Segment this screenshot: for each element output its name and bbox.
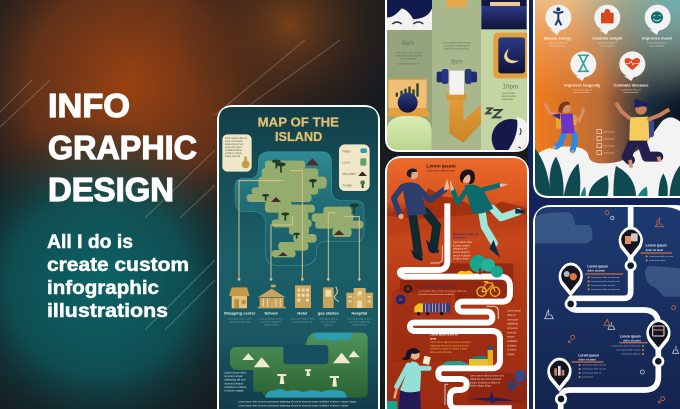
stop 4 text: Lorem ipsum dolor sit amet [582,364,606,367]
dumbbell arm [437,69,481,143]
white cliffs [535,117,680,200]
side text: eiusmod [507,332,517,334]
note card: et dolore magna [225,152,243,155]
body text block 1: adipiscing elit [453,248,467,251]
road side lines [430,246,498,405]
building captions: adipiscing [324,324,333,326]
zz [486,108,501,117]
benefit labels: Improves longevity [564,82,601,87]
legend card [339,144,370,191]
stop 4 text [572,353,606,379]
body text block 3: aliqua enim ad minim [430,352,452,354]
note card: Lorem ipsum dolor sit [225,137,248,140]
body text block 1: sit amet consect [453,244,470,247]
side text [507,310,521,356]
small list: Lorem ipsum [603,138,615,141]
stop 3 text: Lorem ipsum dolor sit amet cons [612,345,640,348]
lower island note: Lorem ipsum dolor [224,370,246,374]
heading: Lorem ipsum [426,164,456,169]
side text: incididunt [507,340,518,343]
benefit captions: amet consectetur [575,91,590,94]
building captions: consectetur adipiscing [230,320,249,323]
trees [457,255,503,278]
body text block 1: Kheerna [453,236,465,240]
panel: route map [533,203,680,409]
girl jumping [545,102,584,153]
title: info graphic design: DESIGN [48,171,174,208]
clouds [535,212,680,297]
note card [222,134,252,172]
legend card: Mountain [342,172,356,176]
lower text [470,375,504,388]
bubble: combats diseases [619,51,645,81]
woman high five [450,169,524,253]
benefit labels [544,36,672,87]
building captions: sed do eiusmod [264,324,278,326]
route road [561,203,658,409]
body text block 1: tempor incididunt [453,254,471,257]
benefit captions: amet consectetur [623,91,639,94]
building captions: Lorem ipsum dolor sit amet [259,317,283,320]
body text block 2: elit sed do eiusmod tempor incididunt [418,293,454,296]
stop 2 text [585,264,623,291]
building labels: Shopping center [224,310,256,315]
map heading [258,117,339,142]
10pm: 10pm [502,83,518,90]
lower island note: et dolore magna [224,389,244,393]
gears [397,286,411,303]
small list [597,129,615,155]
10pm [502,83,518,101]
stop 1 text [641,243,673,262]
body text block 1: Lorem ipsum dolor [453,241,472,244]
town [442,344,493,366]
3pm: consectetur adipiscing elit [443,44,470,47]
pin 3 [646,319,671,353]
top centre block [447,0,467,7]
building captions: consectetur adipiscing [261,320,281,323]
3pm: Lorem ipsum dolor sit amet [443,41,471,44]
stop 3 text: Lorem ipsum dolor sit amet [616,349,641,352]
lagoon [235,152,364,266]
benefit labels: Combats diseases [613,82,649,87]
3pm [443,41,471,65]
stop 4 text: dolor sit amet [578,357,596,361]
building captions: Lorem ipsum dolor sit amet [290,317,315,320]
icon: school [258,285,286,308]
stop 2 text: Lorem ipsum dolor sit amet cons [591,288,620,291]
body text block 2 [418,286,467,296]
benefit captions [548,42,667,94]
side text: magna [507,354,515,356]
lower text: dolore magna aliqua [470,385,492,388]
building captions: consectetur adipiscing [349,320,369,323]
boy jumping [616,99,669,168]
tagline: illustrations [47,301,168,322]
tagline: infographic [47,278,159,299]
bubble: controls weight [594,5,620,35]
lower island note: eiusmod tempor [224,381,243,385]
stop 3 text: Lorem ipsum [620,334,641,338]
8am: Lorem ipsum dolor sit [397,62,420,65]
lower island note: sit amet consec [224,374,243,378]
airplane [470,392,514,404]
building labels: Hospital [351,310,367,315]
building labels: Hotel [297,310,307,315]
body text block 1: Random Lorem Ip [453,232,479,236]
benefit captions: Lorem ipsum dolor sit [621,88,641,91]
side text: dolor sit [507,314,516,317]
map heading: ISLAND [275,129,323,144]
legend card: Jungle [342,183,352,187]
heading [426,164,456,172]
building captions: amet consectetur [321,320,336,323]
top right pillow [481,0,527,29]
note card: aliqua enim ad [225,156,241,158]
bubble: boosts energy [545,5,571,35]
stop 3 text [612,334,648,356]
benefit labels: Boosts energy [544,36,572,41]
10pm: consectetur [502,98,514,101]
side text: adipiscing [507,324,518,326]
lower island note: adipiscing elit sed [224,378,246,382]
body text block 3: amet [430,336,436,340]
pin 1 [619,227,643,261]
truck [414,303,450,315]
stop 2 text: Lorem ipsum dolor sit amet [591,284,615,287]
hills [387,188,527,233]
benefit captions: Lorem ipsum dolor sit [598,42,617,45]
body text block 1 [453,232,479,261]
body text block 3 [430,332,471,354]
stop 1 text: Lorem ipsum dolor sit amet [649,255,673,258]
panel: teamwork road [385,156,529,409]
title: info graphic design: INFO [48,87,130,124]
benefit captions: amet consectetur [649,44,665,47]
lower island note [224,372,246,392]
benefit labels: Improves mood [642,36,672,41]
lower island note: incididunt ut labore [224,385,247,389]
stop 4 text: Lorem ipsum dolor sit [582,372,601,375]
stop 1 text: Lorem ipsum dolor [649,259,666,262]
leader lines [239,171,359,278]
building captions: Lorem ipsum dolor sit amet [228,317,252,320]
lower text: adipiscing elit sed do eiusmod [470,378,502,381]
pin 4 [547,358,572,392]
building labels: gas station [318,310,339,315]
lower text: tempor incididunt ut labore et [470,381,500,384]
stop 2 text: Lorem ipsum [587,264,608,268]
footer text: Lorem ipsum dolor sit amet consectetur adipiscing elit sed do eiusmod tempor incididunt ut labore et dolore [238,404,349,407]
road [400,203,512,408]
small location and boat icons [545,211,679,403]
building labels: School [264,310,278,315]
lower text: Lorem ipsum dolor sit amet cons [470,375,504,378]
icon: shopping center [229,287,250,308]
land masses [247,161,363,257]
foliage [535,148,680,199]
building captions: Lorem ipsum dolor sit amet [347,317,372,320]
side text: et dolore [507,349,517,352]
stop 1 text: Lorem ipsum [646,243,667,247]
legend card: Land [342,161,350,165]
map heading: MAP OF THE [258,115,339,130]
stop 2 text: Lorem ipsum dolor sit amet cons [591,280,620,283]
small list: Lorem ipsum [603,145,615,148]
body text block 2: Lorem ipsum Amagne Kotuma [418,286,455,289]
footer text [238,401,357,407]
sleeping face top [385,0,432,30]
building captions: sed do eiusmod [352,324,366,326]
panel: benefits of exercise [533,0,680,200]
stop 3 text: dolor sit amet [623,338,641,342]
side text: Lorem ipsum [507,310,521,313]
10pm: dolor sit amet [502,95,516,98]
10pm: Lorem ipsum [502,92,515,95]
benefit labels: Controls weight [592,36,623,41]
map trees and mountains [262,158,359,256]
note card: amet consectetur [225,140,243,143]
route nodes [556,261,663,404]
footer text: Lorem ipsum dolor sit amet consectetur adipiscing elit sed do eiusmod tempor incididunt ut labore et dolore magna [238,401,357,404]
backing behind right panels [528,0,680,409]
stop 2 text: dolor sit amet [587,269,605,273]
pin 2 [559,263,583,297]
8am [394,40,423,65]
stop 3 text: Lorem ipsum dolor sit [621,353,641,356]
stop 4 text: Lorem ipsum [578,353,599,357]
side text: elit sed do [507,327,519,330]
panel: daily routine [385,0,530,158]
dark zones [392,263,527,403]
8am: 8am [402,40,414,47]
note card: incididunt labore [225,149,243,152]
title: info graphic design [48,87,197,208]
laptop person [386,79,432,152]
benefit captions: Lorem ipsum dolor sit [573,88,592,91]
8am: consectetur adipiscing elit [395,54,422,57]
title: info graphic design: GRAPHIC [48,129,197,166]
man [394,168,449,260]
body text block 3: incididunt ut labore et dolore magna [430,348,468,351]
8am: Lorem ipsum dolor sit amet [394,51,423,54]
benefit captions: Lorem ipsum dolor sit [548,42,568,45]
side text: tempor [507,336,515,339]
stop 4 text: Lorem ipsum dolor sit amet [582,368,606,371]
body text block 1: sed do eiusmod [453,252,470,254]
icon: hotel [295,285,311,308]
side text: amet cons [507,318,519,321]
body text block 2: Lorem ipsum dolor sit amet consectetur adipiscing [418,290,467,293]
balloons [508,370,526,392]
building captions [228,318,372,326]
tagline: create custom [47,255,189,276]
moon window [493,33,530,78]
3pm: 3pm [451,58,463,65]
note card: adipiscing elit sed [225,143,244,146]
stop 2 text: Lorem ipsum dolor sit amet cons [591,276,620,279]
sleeping head [492,116,527,150]
bubble: improves longevity [570,51,596,81]
panel: map of the island [217,105,380,409]
bicycle [477,282,500,296]
body text block 3: Lorem ipsum dolor sit [430,332,458,336]
benefit captions: amet consectetur [550,44,566,47]
icon: hospital [346,288,373,308]
bubble: improves mood [645,5,671,35]
tagline: All I do is [47,232,133,253]
icon: gas station [323,287,339,308]
building labels [224,312,367,316]
stop 4 text: Lorem ipsum [582,376,594,379]
side text: ut labore [507,344,517,347]
note card: eiusmod tempor [225,146,242,149]
heading: Lorem ipsum dolor sit amet [427,170,455,173]
legend card: Water [342,149,352,153]
building captions: Lorem ipsum dolor sit [319,317,338,320]
lower island [230,333,368,398]
body text block 3: Lorem ipsum dolor sit amet consectetur [430,341,471,344]
woman with book [387,348,431,409]
benefit captions: amet consectetur [600,44,615,47]
8am: sed do eiusmod [400,58,417,60]
leader dots [238,278,361,281]
3pm: sed do eiusmod tempor [444,47,469,50]
benefit captions: Lorem ipsum dolor sit [647,42,667,45]
building captions: consectetur adipiscing [293,320,312,323]
body text block 1: ut labore dolore [453,258,470,261]
tagline [47,232,189,322]
small list: Lorem ipsum [603,152,615,155]
small list: Lorem ipsum [603,131,615,134]
body text block 3: adipiscing elit sed do eiusmod tempor [430,344,469,347]
routine columns [385,0,528,153]
stop 1 text: dolor sit amet [646,248,663,252]
